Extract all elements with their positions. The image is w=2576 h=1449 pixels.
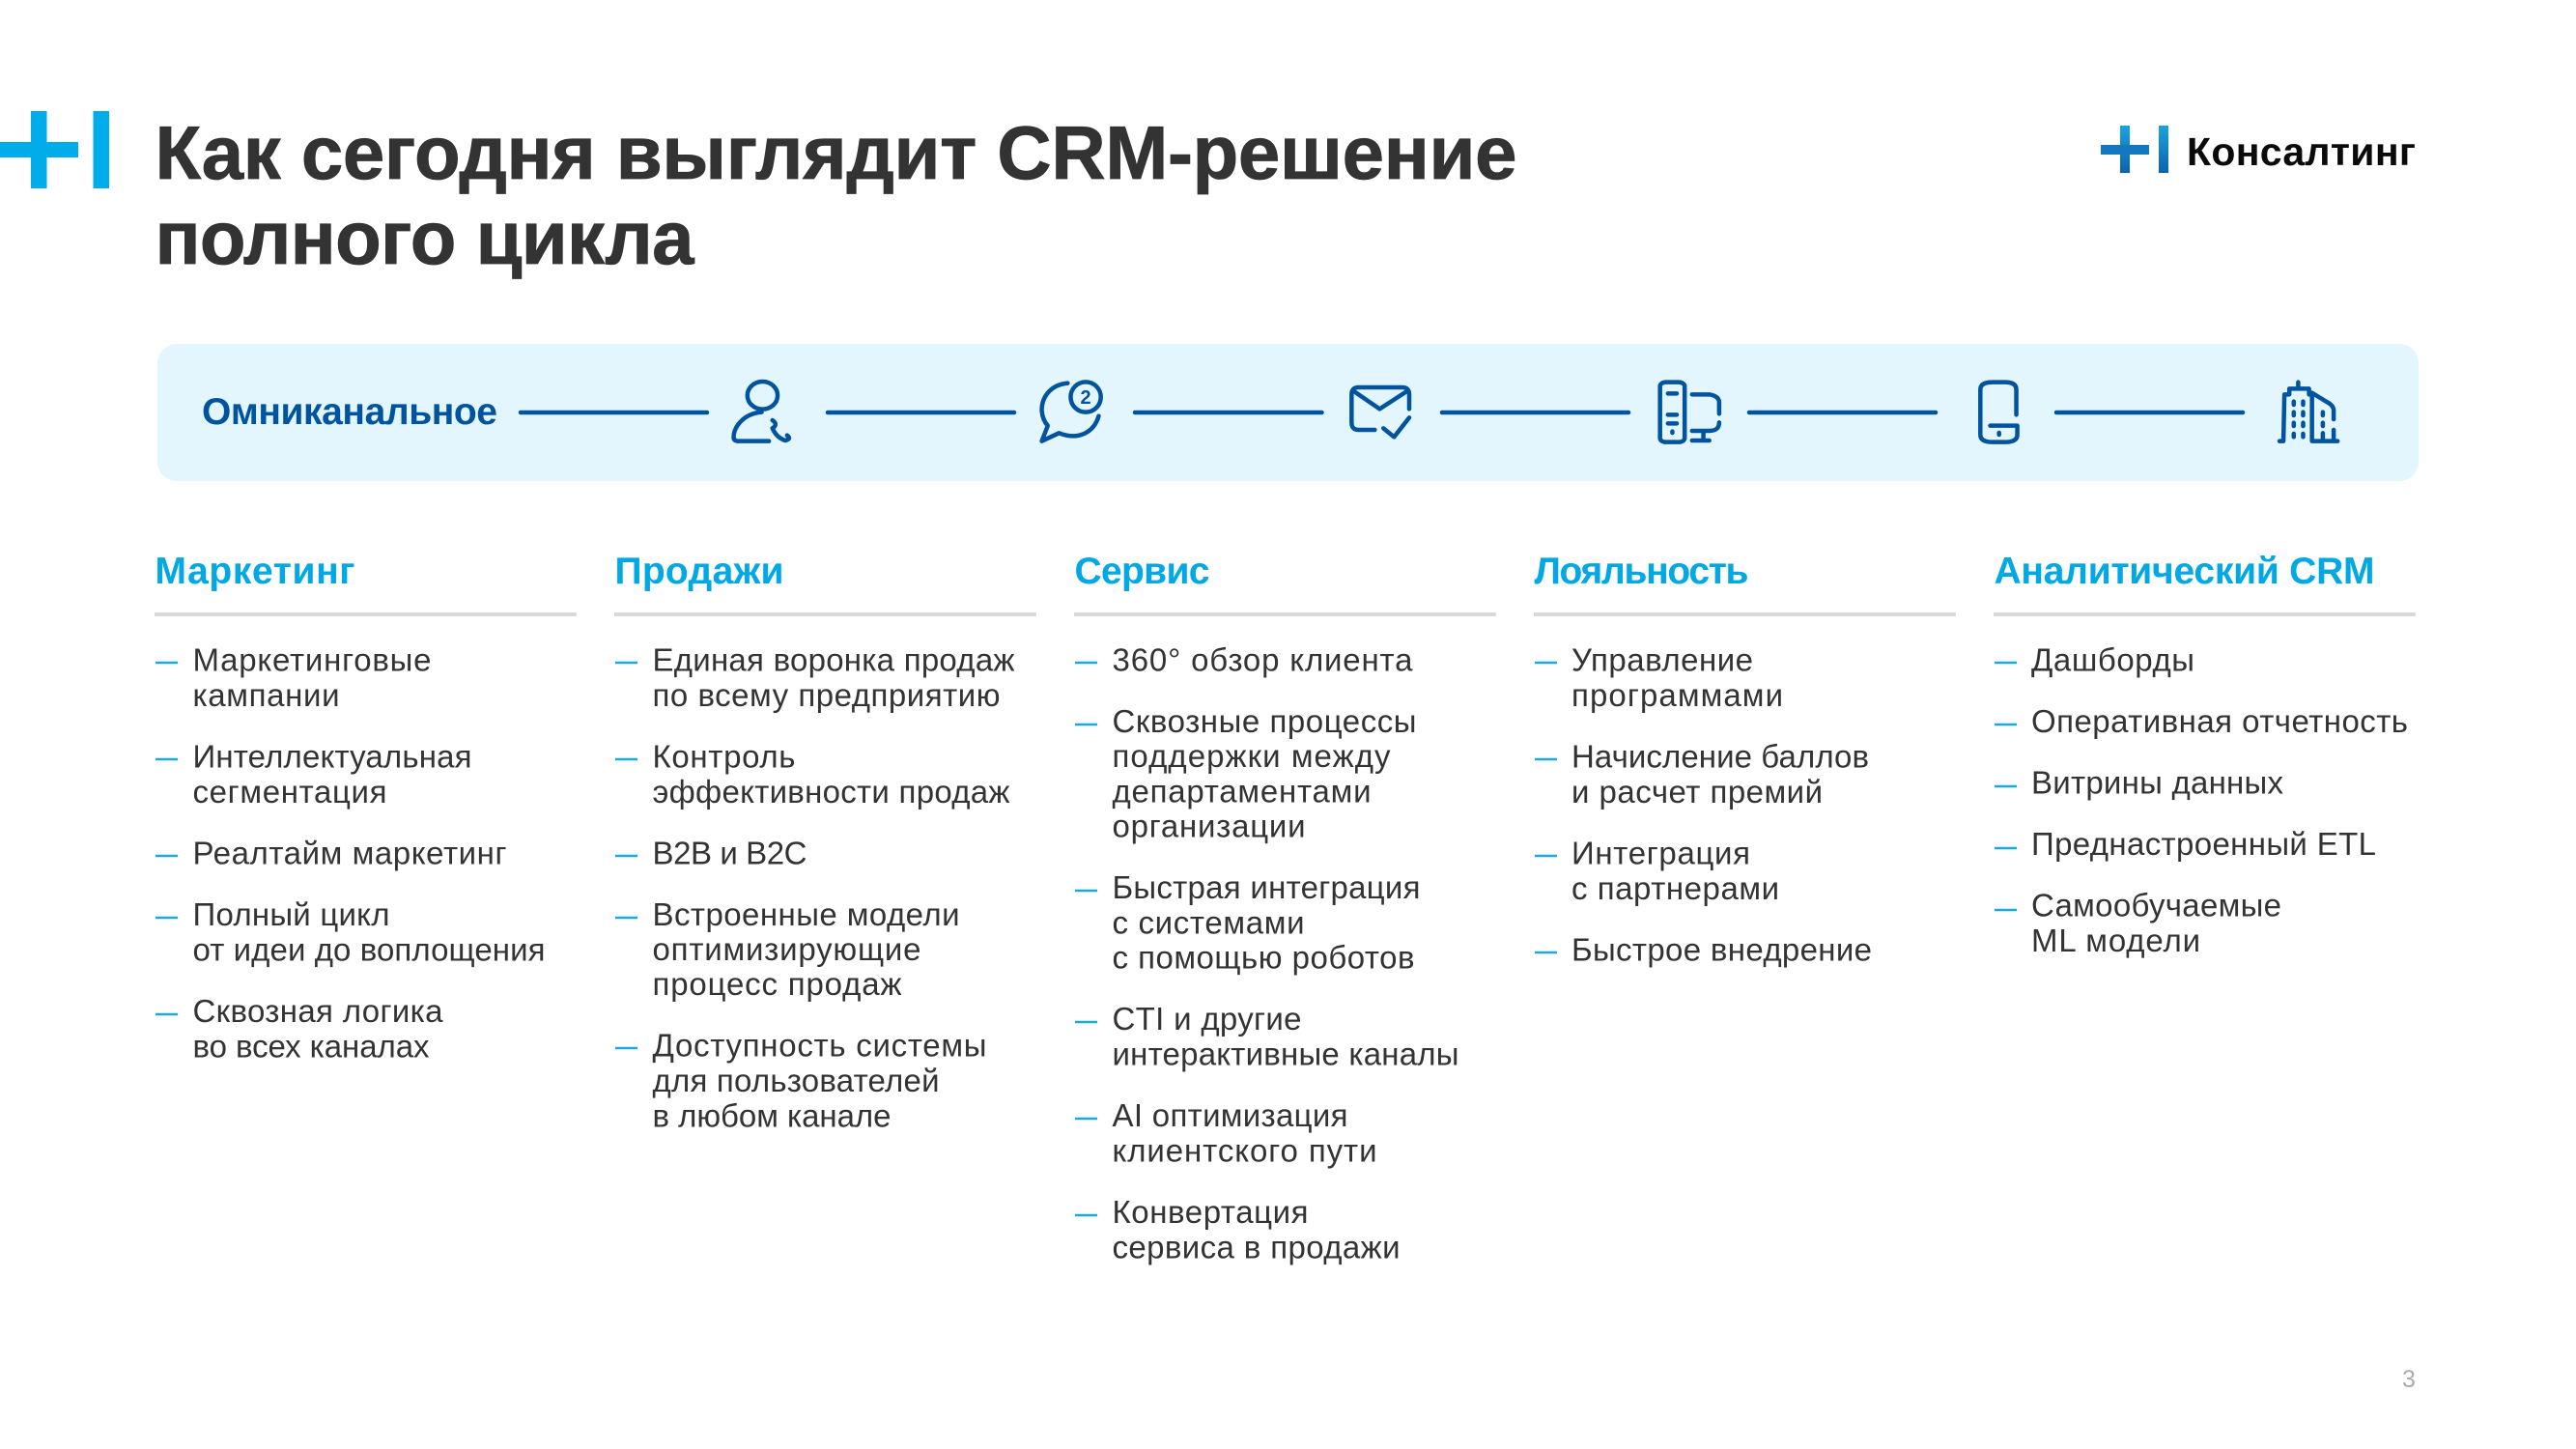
list: интерактивные каналы [1113, 1036, 1458, 1072]
panel: Лояльность [1534, 551, 1956, 968]
list: поддержки между [1113, 738, 1391, 774]
list: Контроль [653, 738, 796, 775]
connector lines [521, 411, 2243, 414]
icon: smartphone [1980, 383, 2018, 442]
list: для пользователей [653, 1063, 939, 1098]
list: B2B и B2C [653, 835, 807, 871]
list: 360° обзор клиента [1113, 641, 1413, 678]
list: сервиса в продажи [1113, 1229, 1401, 1265]
icon: desktop computer [1660, 383, 1719, 442]
heading: Аналитический CRM [1994, 551, 2374, 592]
list: Встроенные модели [653, 896, 960, 932]
list: с помощью роботов [1113, 939, 1414, 976]
list: CTI и другие [1113, 1001, 1302, 1037]
list: Интеграция [1571, 835, 1750, 871]
list: Маркетинговые [193, 641, 431, 678]
list: во всех каналах [193, 1028, 430, 1065]
icon: person with phone [734, 382, 789, 441]
list: Дашборды [2031, 641, 2194, 678]
list: Быстрое внедрение [1571, 931, 1872, 968]
heading: Лояльность [1534, 551, 1748, 592]
band label: Омниканальное [202, 391, 497, 433]
list: Полный цикл [193, 896, 390, 932]
logo: plus-one mark [0, 111, 109, 188]
panel: omnichannel band [157, 344, 2419, 481]
list: Сквозные процессы [1113, 703, 1416, 739]
list: Сквозная логика [193, 993, 443, 1029]
logo: Консалтинг [2101, 126, 2416, 174]
list: Реалтайм маркетинг [193, 835, 506, 871]
logo: Консалтинг: Консалтинг [2187, 129, 2416, 174]
list [615, 641, 1014, 1134]
list: по всему предприятию [653, 677, 1001, 713]
list: программами [1571, 677, 1783, 713]
list: Быстрая интеграция [1113, 869, 1420, 905]
list [1075, 641, 1458, 1265]
list: и расчет премий [1571, 774, 1823, 810]
title: полного цикла [155, 195, 694, 280]
list: клиентского пути [1113, 1132, 1377, 1169]
list: департаментами [1113, 773, 1372, 810]
list: сегментация [193, 774, 386, 810]
list: Самообучаемые [2031, 887, 2281, 923]
list: процесс продаж [653, 966, 902, 1002]
icon: chat bubble [1042, 382, 1101, 441]
list: от идеи до воплощения [193, 931, 545, 968]
heading: Маркетинг [155, 551, 355, 592]
list [1995, 641, 2408, 958]
list: эффективности продаж [653, 774, 1010, 810]
panel: Аналитический CRM [1994, 551, 2416, 958]
list: оптимизирующие [653, 931, 921, 967]
title: Как сегодня выглядит CRM-решение [155, 110, 1516, 195]
list: Доступность системы [653, 1028, 987, 1063]
list: с партнерами [1571, 870, 1779, 906]
page number: 3 [2402, 1366, 2416, 1393]
list: Начисление баллов [1571, 738, 1869, 775]
list: с системами [1113, 904, 1304, 941]
panel: Маркетинг [155, 551, 577, 1065]
icon: chat badge number: 2 [1080, 387, 1091, 409]
title [155, 110, 1516, 280]
list: ML модели [2031, 923, 2200, 958]
list: Преднастроенный ETL [2031, 826, 2376, 862]
list: AI оптимизация [1113, 1097, 1348, 1133]
heading: Сервис [1074, 551, 1209, 592]
list: Конвертация [1113, 1194, 1308, 1230]
list: кампании [193, 677, 340, 713]
icon: envelope with check [1351, 387, 1409, 437]
list [156, 641, 545, 1065]
list: Интеллектуальная [193, 738, 471, 775]
list: организации [1113, 808, 1306, 844]
list: в любом канале [653, 1097, 891, 1134]
heading: Продажи [614, 551, 784, 592]
list: Единая воронка продаж [653, 641, 1014, 678]
list: Витрины данных [2031, 765, 2283, 800]
icon: office building [2279, 383, 2337, 441]
list [1535, 641, 1872, 968]
panel: Продажи [614, 551, 1036, 1134]
panel: Сервис [1074, 551, 1496, 1265]
list: Оперативная отчетность [2031, 703, 2408, 739]
list: Управление [1571, 641, 1753, 678]
